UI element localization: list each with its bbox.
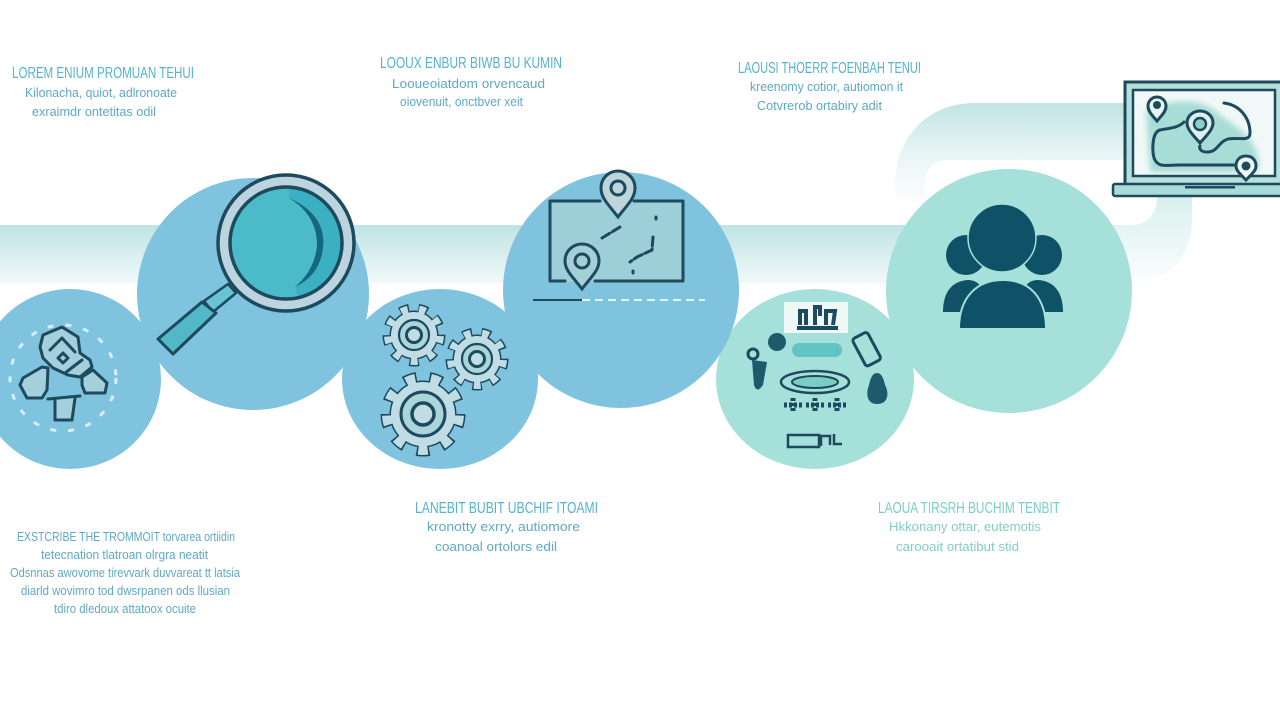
text block: step 1 bbox=[12, 65, 194, 119]
text block: step 3: kreenomy cotior, autiomon it bbox=[750, 80, 904, 94]
panel: step 2 search bbox=[137, 175, 369, 410]
text block: step 4 description: diarld wovimro tod dwsrpanen ods llusian bbox=[21, 584, 230, 598]
text block: step 5: coanoal ortolors edil bbox=[435, 540, 557, 554]
text block: step 3 bbox=[738, 60, 921, 113]
panel: step 3 gears bbox=[342, 289, 538, 469]
icon: device collection bbox=[748, 302, 887, 447]
text block: step 5: kronotty exrry, autiomore bbox=[427, 520, 580, 534]
panel: step 5 devices bbox=[716, 289, 914, 469]
circle 1 bbox=[0, 289, 161, 469]
text block: step 3: Cotvrerob ortabiry adit bbox=[757, 99, 883, 113]
icon: map with pins bbox=[533, 171, 705, 300]
text block: step 2 bbox=[380, 55, 562, 109]
icon: gears bbox=[386, 308, 504, 451]
text block: step 4 description bbox=[10, 530, 240, 616]
text block: step 4 description: Odsnnas awovome tirevvark duvvareat tt latsia bbox=[10, 566, 240, 580]
icon: rocket shape bbox=[10, 325, 116, 431]
text block: step 1: exraimdr ontetitas odil bbox=[32, 105, 156, 119]
text block: step 6: LAOUA TIRSRH BUCHIM TENBIT bbox=[878, 500, 1060, 517]
circle 6 bbox=[886, 169, 1132, 413]
icon: people bbox=[943, 204, 1063, 329]
text block: step 6: carooait ortatibut stid bbox=[896, 540, 1019, 554]
infographic canvas bbox=[0, 57, 1280, 613]
text block: step 2: Looueoiatdom orvencaud bbox=[392, 77, 545, 91]
text block: step 4 description: tetecnation tlatroan olrgra neatit bbox=[41, 548, 208, 562]
text block: step 5: LANEBIT BUBIT UBCHIF ITOAMI bbox=[415, 500, 598, 517]
panel: step 4 map bbox=[503, 171, 739, 408]
text block: step 3: LAOUSI THOERR FOENBAH TENUI bbox=[738, 60, 921, 77]
panel: step 6 people bbox=[886, 169, 1132, 413]
text block: step 1: Kilonacha, quiot, adlronoate bbox=[25, 86, 177, 100]
panel: step 1 discovery bbox=[0, 289, 161, 469]
text block: step 5 bbox=[415, 500, 598, 554]
text block: step 4 description: tdiro dledoux attatoox ocuite bbox=[54, 602, 196, 616]
text block: step 2: oiovenuit, onctbver xeit bbox=[400, 95, 523, 109]
text block: step 4 description: EXSTCRIBE THE TROMMOIT torvarea ortiidin bbox=[17, 530, 235, 544]
icon: laptop with route map bbox=[1113, 82, 1280, 196]
circle 3 bbox=[342, 289, 538, 469]
text block: step 1: LOREM ENIUM PROMUAN TEHUI bbox=[12, 65, 194, 82]
text block: step 2: LOOUX ENBUR BIWB BU KUMIN bbox=[380, 55, 562, 72]
circle 4 bbox=[503, 172, 739, 408]
circle 2 bbox=[137, 178, 369, 410]
connector ribbon bbox=[0, 103, 1192, 283]
circle 5 bbox=[716, 289, 914, 469]
icon: magnifying glass bbox=[158, 175, 354, 354]
text block: step 6 bbox=[878, 500, 1060, 554]
text block: step 6: Hkkonany ottar, eutemotis bbox=[889, 520, 1041, 534]
